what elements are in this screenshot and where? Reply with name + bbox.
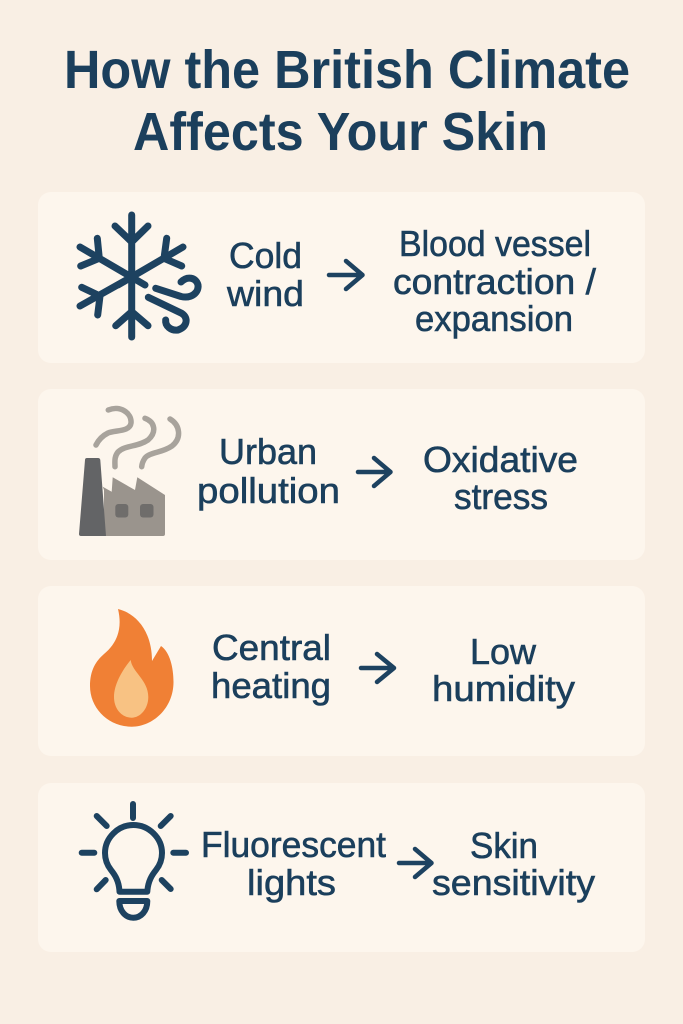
text: low humidity: Low bbox=[470, 631, 537, 672]
text: oxidative stress bbox=[423, 439, 578, 517]
text: blood vessel contraction / expansion: contraction / bbox=[393, 261, 596, 302]
text: fluorescent lights: lights bbox=[247, 862, 336, 903]
arrow bbox=[399, 849, 432, 877]
text: oxidative stress: stress bbox=[454, 476, 548, 517]
title: Affects Your Skin bbox=[133, 102, 548, 162]
icon: factory with smoke bbox=[79, 408, 179, 536]
text: cold wind: wind bbox=[226, 273, 304, 314]
text: fluorescent lights: Fluorescent bbox=[201, 824, 386, 865]
text: central heating bbox=[211, 627, 331, 706]
text: urban pollution: Urban bbox=[219, 431, 317, 472]
text: skin sensitivity: Skin bbox=[470, 825, 538, 866]
panel: cold wind bbox=[38, 192, 645, 363]
icon: snowflake with wind bbox=[80, 215, 198, 337]
arrow bbox=[358, 458, 390, 486]
text: cold wind: Cold bbox=[229, 235, 302, 276]
title bbox=[64, 40, 630, 162]
panel: urban pollution bbox=[38, 389, 645, 560]
icon: flame bbox=[90, 609, 174, 727]
text: blood vessel contraction / expansion: Blood vessel bbox=[399, 223, 591, 264]
text: fluorescent lights bbox=[201, 824, 386, 903]
text: urban pollution: pollution bbox=[197, 470, 340, 511]
text: oxidative stress: Oxidative bbox=[423, 439, 578, 480]
text: urban pollution bbox=[197, 431, 340, 511]
title: How the British Climate bbox=[64, 40, 630, 100]
panel: central heating bbox=[38, 586, 645, 756]
text: skin sensitivity: sensitivity bbox=[432, 862, 595, 903]
icon: light bulb bbox=[82, 804, 186, 918]
text: central heating: heating bbox=[211, 665, 331, 706]
text: low humidity bbox=[432, 631, 575, 709]
arrow bbox=[361, 654, 394, 682]
text: central heating: Central bbox=[212, 627, 331, 668]
text: low humidity: humidity bbox=[432, 668, 575, 709]
text: blood vessel contraction / expansion bbox=[393, 223, 596, 339]
arrow bbox=[329, 261, 362, 289]
text: blood vessel contraction / expansion: expansion bbox=[415, 298, 573, 339]
text: cold wind bbox=[226, 235, 304, 314]
text: skin sensitivity bbox=[432, 825, 595, 903]
panel: fluorescent lights bbox=[38, 783, 645, 952]
